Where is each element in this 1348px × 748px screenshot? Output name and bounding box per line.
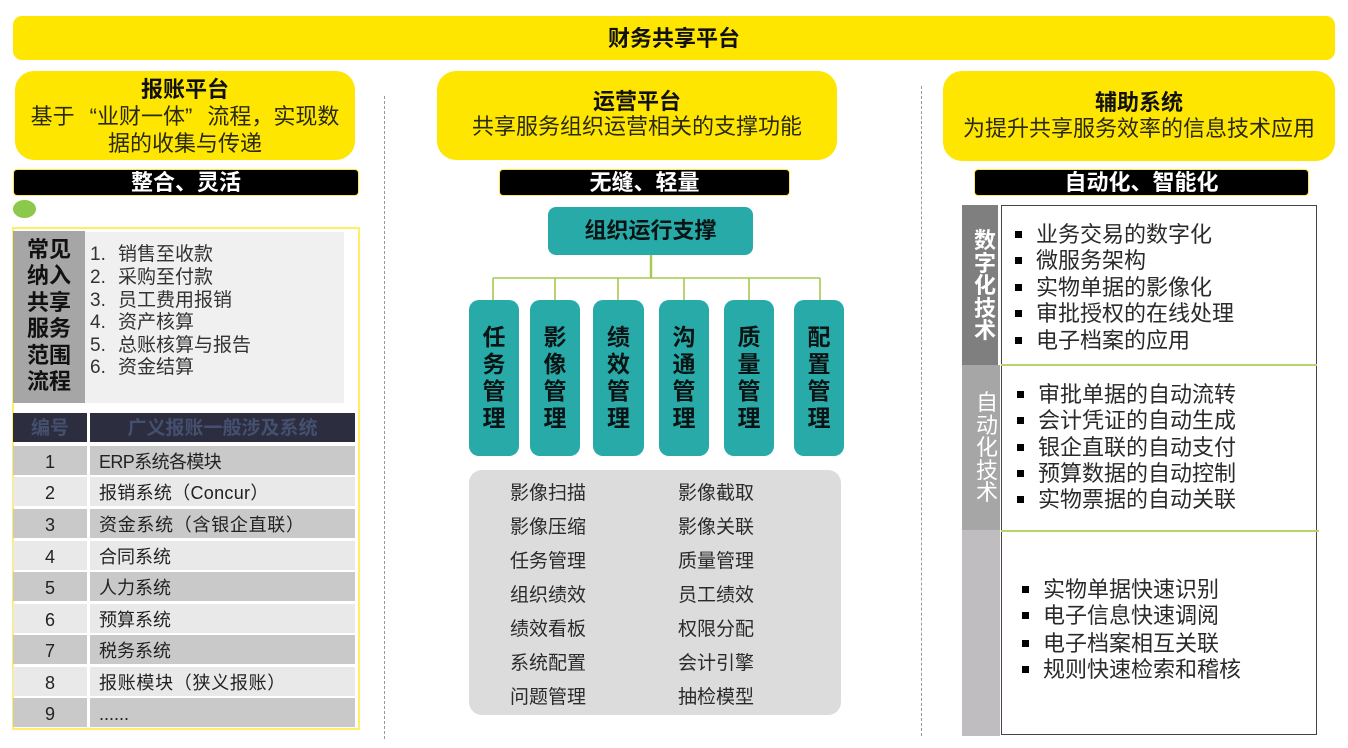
sidebar: digital technology: 数: [974, 228, 996, 253]
node: configuration management: 理: [808, 405, 830, 431]
sidebar: digital technology: 字: [974, 250, 996, 276]
heading card: reimbursement platform: 流程，实现数: [207, 104, 339, 129]
panel: function list: 质量管理: [678, 551, 754, 572]
list: digital technology: 微服务架构: [1036, 248, 1146, 273]
label: seamless and lightweight: 无缝、轻量: [589, 170, 700, 195]
list: automation technology: 会计凭证的自动生成: [1038, 408, 1236, 433]
title: finance shared platform banner: [13, 16, 1335, 60]
divider: dashed left: [384, 96, 385, 739]
node: quality management: 管: [738, 378, 760, 404]
node: communication management: 管: [672, 378, 696, 404]
list: automation technology: 审批单据的自动流转: [1038, 382, 1236, 407]
list: intelligent technology: 实物单据快速识别: [1043, 577, 1219, 602]
node: quality management: [724, 300, 774, 456]
table: systems involved in reimbursement: 3: [45, 515, 55, 535]
panel: function list: 任务管理: [510, 551, 586, 572]
node: image management: 管: [544, 378, 566, 404]
list: process scope: 3.: [90, 290, 106, 311]
panel: function list: 影像扫描: [510, 483, 586, 504]
root node: [548, 207, 753, 255]
sidebar: automation technology: 术: [976, 480, 998, 505]
heading card: reimbursement platform: “业财一体”: [90, 104, 192, 129]
node: task management: 务: [482, 351, 506, 377]
list: process scope: 销售至收款: [118, 244, 213, 265]
label: seamless and lightweight: [499, 169, 790, 196]
node: image management: 理: [544, 405, 566, 431]
sidebar: digital technology: 术: [974, 318, 996, 343]
table: systems involved in reimbursement: ......: [99, 704, 129, 724]
node: performance management: 绩: [607, 324, 630, 350]
panel: function list: 影像截取: [678, 483, 754, 504]
list: process scope: 员工费用报销: [118, 290, 232, 311]
heading card: operations platform: 共享服务组织运营相关的支撑功能: [472, 114, 802, 139]
table: systems involved in reimbursement: 税务系统: [99, 641, 171, 661]
label: automation and intelligence: [974, 169, 1309, 196]
list: process scope: 资金结算: [118, 357, 194, 378]
heading card: reimbursement platform: 据的收集与传递: [108, 131, 262, 156]
sidebar: common shared process scope: [13, 231, 85, 403]
heading card: reimbursement platform: 基于: [31, 104, 75, 129]
list: digital technology: [1015, 222, 1234, 353]
node: communication management: 沟: [672, 324, 696, 350]
node: quality management: 质: [738, 324, 760, 350]
table header: system: [90, 413, 355, 442]
list: digital technology: 审批授权的在线处理: [1036, 301, 1234, 326]
root node: 组织运行支撑: [584, 218, 716, 243]
table: systems involved in reimbursement: 8: [45, 673, 55, 693]
table: systems involved in reimbursement: 7: [45, 641, 55, 661]
node: configuration management: 置: [808, 351, 830, 377]
table: systems involved in reimbursement: 预算系统: [99, 610, 171, 630]
sidebar: digital technology: 技: [974, 296, 996, 320]
sidebar: common shared process scope: 共享: [27, 290, 71, 315]
node: quality management: 量: [738, 351, 760, 377]
node: performance management: 管: [607, 378, 630, 404]
panel: function list: 绩效看板: [510, 619, 586, 640]
table: systems involved in reimbursement: ERP系统各模块: [99, 452, 221, 472]
panel: function list: [469, 470, 841, 715]
table header: system: 广义报账一般涉及系统: [127, 418, 318, 439]
sidebar: common shared process scope: 纳入: [27, 263, 71, 288]
list: digital technology: 实物单据的影像化: [1036, 275, 1212, 300]
node: communication management: [659, 300, 709, 456]
list: process scope: 采购至付款: [118, 267, 213, 288]
panel: function list: 影像压缩: [510, 517, 586, 538]
table: systems involved in reimbursement: [13, 413, 355, 727]
sidebar: common shared process scope: 范围: [27, 343, 71, 368]
sidebar: common shared process scope: 常见: [27, 237, 71, 262]
heading card: operations platform: [437, 71, 837, 160]
sidebar: automation technology: 自: [976, 390, 998, 415]
node: communication management: 通: [672, 351, 696, 377]
table: systems involved in reimbursement: 报销系统（Concur）: [99, 483, 269, 503]
node: image management: 像: [544, 351, 566, 377]
node: communication management: 理: [672, 405, 696, 431]
panel: function list: 会计引擎: [678, 653, 754, 674]
icon: green oval: [13, 200, 36, 218]
list: intelligent technology: 电子档案相互关联: [1043, 631, 1219, 656]
heading card: supporting systems: 辅助系统: [1095, 90, 1183, 115]
list: automation technology: [1017, 382, 1236, 512]
list: process scope: 6.: [90, 357, 106, 378]
title: finance shared platform banner: 财务共享平台: [608, 26, 740, 51]
heading card: supporting systems: 为提升共享服务效率的信息技术应用: [963, 116, 1315, 141]
table: systems involved in reimbursement: 资金系统（含银企直联）: [99, 515, 305, 535]
heading card: reimbursement platform: 报账平台: [141, 77, 229, 102]
org chart: organization operation support: [492, 207, 821, 300]
list: process scope: 1.: [90, 244, 106, 265]
panel: function list: 问题管理: [510, 687, 586, 708]
sidebar: common shared process scope: 流程: [27, 369, 71, 394]
label: integrated and flexible: [13, 169, 359, 196]
table: systems involved in reimbursement: 1: [45, 452, 55, 472]
node: configuration management: 配: [808, 324, 830, 350]
node: performance management: [593, 300, 644, 456]
list: process scope: 5.: [90, 335, 106, 356]
node: task management: 管: [482, 378, 506, 404]
table: systems involved in reimbursement: 5: [45, 578, 55, 598]
table header: number: [13, 413, 87, 442]
node: performance management: 效: [607, 351, 630, 377]
table: systems involved in reimbursement: 4: [45, 547, 55, 567]
node: quality management: 理: [738, 405, 760, 431]
list: process scope: 4.: [90, 312, 106, 333]
panel: yellow bordered scope and systems box: [12, 227, 360, 730]
list: process scope: 资产核算: [118, 312, 194, 333]
sidebar: automation technology: 动: [976, 412, 998, 438]
list: intelligent technology: 电子信息快速调阅: [1043, 603, 1219, 628]
sidebar: automation technology: 化: [976, 435, 998, 460]
list: digital technology: 业务交易的数字化: [1036, 222, 1212, 247]
sidebar: common shared process scope: 服务: [27, 316, 71, 341]
node: task management: [469, 300, 519, 456]
node: configuration management: 管: [808, 378, 830, 404]
node: configuration management: [794, 300, 844, 456]
rule: green separator one: [1001, 364, 1317, 366]
panel: function list: 抽检模型: [678, 687, 754, 708]
panel: function list: 员工绩效: [678, 585, 754, 606]
panel: function list: 权限分配: [678, 619, 754, 640]
panel: function list: 组织绩效: [510, 585, 586, 606]
sidebar: digital technology: [962, 205, 998, 365]
table: systems involved in reimbursement: 9: [45, 704, 55, 724]
node: task management: 任: [482, 324, 506, 350]
heading card: operations platform: 运营平台: [593, 89, 681, 114]
sidebar: automation technology: [962, 365, 1000, 530]
list: process scope: 总账核算与报告: [118, 335, 251, 356]
list: automation technology: 预算数据的自动控制: [1038, 461, 1236, 486]
panel: function list: 系统配置: [510, 653, 586, 674]
list: intelligent technology: [1022, 577, 1241, 682]
divider: dashed right: [921, 86, 922, 736]
node: task management: 理: [482, 405, 506, 431]
table: systems involved in reimbursement: 6: [45, 610, 55, 630]
heading card: supporting systems: [943, 71, 1335, 161]
rule: green separator two: [1001, 530, 1319, 532]
node: performance management: 理: [607, 405, 630, 431]
sidebar: automation technology: 技: [976, 458, 998, 482]
label: automation and intelligence: 自动化、智能化: [1064, 170, 1218, 195]
list: process scope: [85, 232, 344, 403]
label: integrated and flexible: 整合、灵活: [131, 170, 241, 195]
table: systems involved in reimbursement: 人力系统: [99, 578, 171, 598]
connector lines: [492, 255, 821, 300]
table header: number: 编号: [31, 418, 69, 439]
list: automation technology: 银企直联的自动支付: [1038, 435, 1236, 460]
list: process scope: 2.: [90, 267, 106, 288]
node: image management: 影: [544, 324, 566, 350]
table: systems involved in reimbursement: 报账模块（狭义报账）: [99, 673, 286, 693]
sidebar: digital technology: 化: [974, 273, 996, 298]
heading card: reimbursement platform: [15, 71, 355, 160]
node: image management: [530, 300, 580, 456]
list: digital technology: 电子档案的应用: [1036, 328, 1190, 353]
table: systems involved in reimbursement: 2: [45, 483, 55, 503]
panel: function list: 影像关联: [678, 517, 754, 538]
panel: technology details: [1001, 205, 1317, 735]
panel: reimbursement platform: [13, 71, 359, 218]
sidebar: intelligent technology placeholder: [962, 530, 1000, 736]
list: automation technology: 实物票据的自动关联: [1038, 487, 1236, 512]
table: systems involved in reimbursement: 合同系统: [99, 547, 171, 567]
list: intelligent technology: 规则快速检索和稽核: [1043, 657, 1241, 682]
